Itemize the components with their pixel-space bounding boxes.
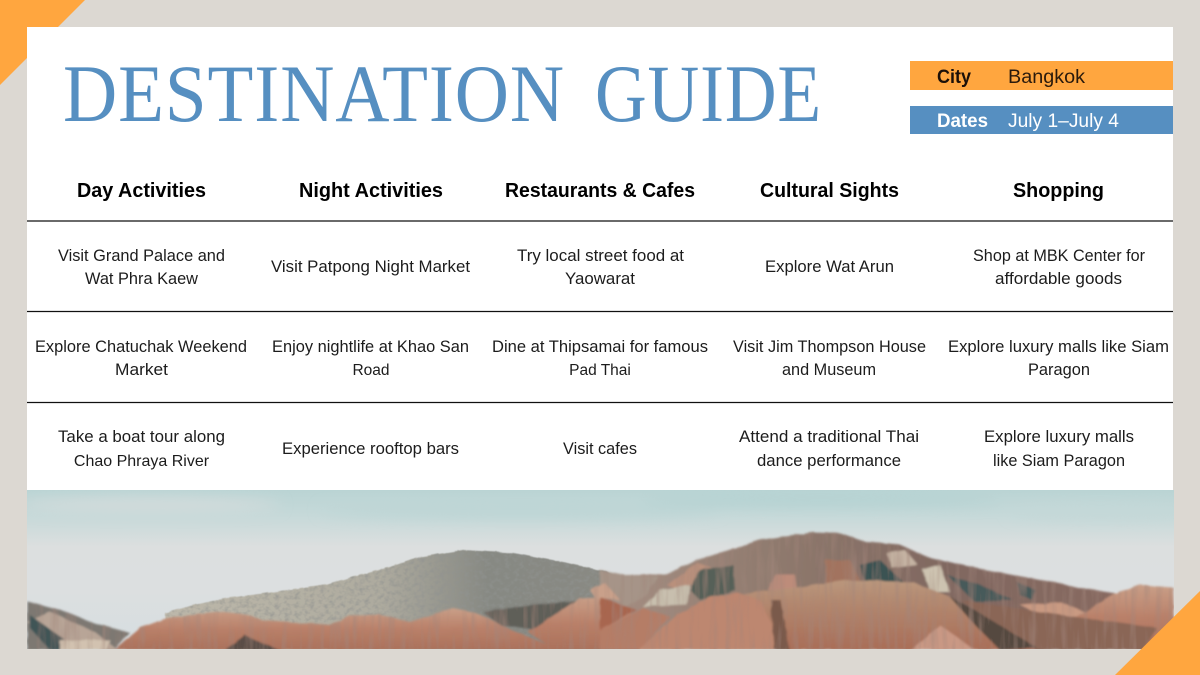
decorative corner: top left xyxy=(0,0,85,85)
cell: thipsamai xyxy=(492,338,708,379)
heading: night activities: Night Activities xyxy=(299,180,443,202)
cell: khao san: Enjoy nightlife at Khao San xyxy=(272,338,469,356)
cell: siam paragon: Explore luxury malls like Siam xyxy=(948,338,1169,356)
photo: desert mountains xyxy=(20,490,1190,650)
heading: day activities: Day Activities xyxy=(77,180,206,202)
table headings xyxy=(77,180,1104,202)
cell: chatuchak: Market xyxy=(115,361,168,379)
cell: yaowarat: Try local street food at xyxy=(517,247,684,265)
cell: khao san: Road xyxy=(352,362,390,379)
cell: grand palace: Wat Phra Kaew xyxy=(85,270,198,288)
cell: chatuchak: Explore Chatuchak Weekend xyxy=(35,338,247,356)
cell: grand palace: Visit Grand Palace and xyxy=(58,247,225,265)
cell: thipsamai: Pad Thai xyxy=(569,362,631,379)
table row 1 xyxy=(58,247,1145,288)
cell: mbk: affordable goods xyxy=(995,270,1122,288)
cell: thai dance: Attend a traditional Thai xyxy=(739,428,919,446)
cell: mbk: Shop at MBK Center for xyxy=(973,247,1145,265)
cell: boat tour xyxy=(58,428,225,470)
title: DESTINATION xyxy=(63,48,565,139)
cell: boat tour: Take a boat tour along xyxy=(58,428,225,446)
cell: thai dance xyxy=(739,428,919,470)
white content panel xyxy=(27,27,1173,490)
cell: wat arun: Explore Wat Arun xyxy=(765,258,894,276)
table row 2 xyxy=(35,338,1169,379)
badge: city xyxy=(910,61,1173,90)
cell: yaowarat xyxy=(517,247,684,288)
heading: shopping: Shopping xyxy=(1013,180,1104,202)
cell: luxury malls: Explore luxury malls xyxy=(984,428,1134,446)
cell: cafes: Visit cafes xyxy=(563,440,637,458)
badge: dates: July 1–July 4 xyxy=(1008,111,1119,132)
table row 3 xyxy=(58,428,1134,470)
cell: luxury malls: like Siam Paragon xyxy=(993,452,1125,470)
badge: dates xyxy=(910,106,1173,134)
heading: cultural sights: Cultural Sights xyxy=(760,180,899,202)
badge: city: Bangkok xyxy=(1008,67,1086,88)
cell: chatuchak xyxy=(35,338,247,379)
cell: thipsamai: Dine at Thipsamai for famous xyxy=(492,338,708,356)
badge: city: City xyxy=(937,67,971,88)
badge: dates: Dates xyxy=(937,111,988,132)
cell: mbk xyxy=(973,247,1145,288)
title: GUIDE xyxy=(595,48,822,139)
info badges xyxy=(910,61,1173,134)
cell: siam paragon xyxy=(948,338,1169,379)
cell: jim thompson: and Museum xyxy=(782,361,876,379)
cell: boat tour: Chao Phraya River xyxy=(74,453,210,470)
decorative corner: bottom right xyxy=(1115,591,1200,675)
cell: patpong: Visit Patpong Night Market xyxy=(271,258,470,276)
cell: khao san xyxy=(272,338,469,379)
cell: siam paragon: Paragon xyxy=(1028,361,1090,379)
cell: jim thompson: Visit Jim Thompson House xyxy=(733,338,926,356)
cell: grand palace xyxy=(58,247,225,288)
heading: restaurants and cafes: Restaurants & Cafes xyxy=(505,180,695,202)
cell: yaowarat: Yaowarat xyxy=(565,270,635,288)
cell: thai dance: dance performance xyxy=(757,452,901,470)
cell: jim thompson xyxy=(733,338,926,379)
cell: luxury malls xyxy=(984,428,1134,470)
cell: rooftop bars: Experience rooftop bars xyxy=(282,440,459,458)
